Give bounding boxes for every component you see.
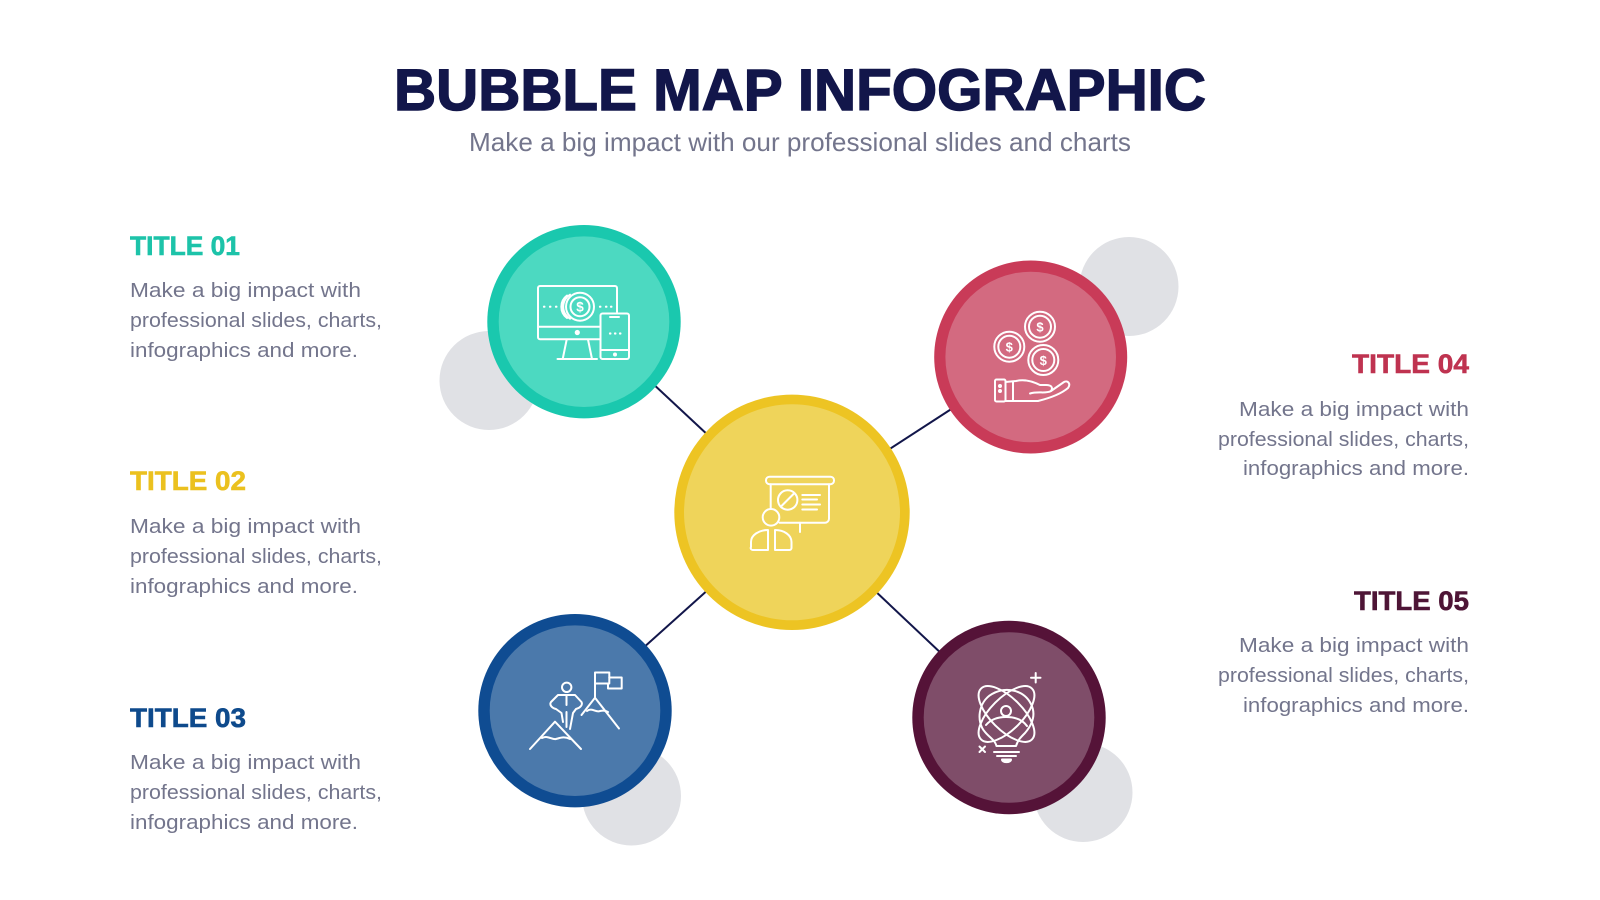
title: BUBBLE MAP INFOGRAPHIC	[394, 58, 1206, 123]
icon: hand with coins	[994, 312, 1069, 402]
icon: hand with coins: $	[1036, 320, 1044, 334]
text block: title 02: TITLE 02	[130, 466, 246, 496]
text block: title 04: TITLE 04	[1352, 349, 1469, 379]
connector lines	[642, 381, 956, 656]
text block: title 05: professional slides, charts,	[1218, 664, 1469, 687]
decorative bubble: blue shadow	[582, 746, 681, 846]
text block: title 03: TITLE 03	[130, 703, 246, 733]
bubble 02: yellow center	[674, 395, 910, 630]
bubble 04: red	[934, 260, 1127, 454]
text block: title 02	[130, 466, 382, 598]
bubble 03: blue	[478, 614, 672, 807]
icon: atom light bulb	[970, 673, 1043, 762]
text block: title 05: Make a big impact with	[1239, 634, 1469, 657]
text block: title 03: professional slides, charts,	[130, 781, 382, 804]
icon: hand with coins: $	[1006, 340, 1014, 354]
text block: title 05: infographics and more.	[1243, 694, 1469, 717]
text block: title 04: infographics and more.	[1243, 457, 1469, 480]
bubble 01: teal	[487, 225, 681, 418]
text block: title 03	[130, 703, 382, 834]
text block: title 04	[1218, 349, 1469, 480]
text block: title 01: Make a big impact with	[130, 279, 361, 302]
text block: title 05	[1218, 586, 1469, 717]
decorative bubble: purple shadow	[1034, 743, 1132, 842]
icon: presenter and board	[751, 477, 834, 550]
icon: monitor and phone with coin: $	[576, 300, 584, 314]
text block: title 03: infographics and more.	[130, 811, 358, 834]
bubble 05: purple	[912, 621, 1106, 814]
text block: title 03: Make a big impact with	[130, 751, 361, 774]
icon: person on mountain with flag	[530, 672, 622, 749]
text block: title 02: professional slides, charts,	[130, 545, 382, 568]
decorative bubble: red shadow	[1080, 237, 1178, 336]
text block: title 02: infographics and more.	[130, 575, 358, 598]
icon: hand with coins: $	[1040, 353, 1048, 368]
text block: title 02: Make a big impact with	[130, 515, 361, 538]
text block: title 01: professional slides, charts,	[130, 309, 382, 332]
text block: title 04: Make a big impact with	[1239, 398, 1469, 421]
subtitle: Make a big impact with our professional slides and charts	[469, 127, 1131, 157]
text block: title 01: TITLE 01	[130, 231, 240, 261]
decorative bubble: teal shadow	[440, 331, 538, 430]
text block: title 01	[130, 231, 382, 362]
text block: title 01: infographics and more.	[130, 339, 358, 362]
icon: monitor and phone with coin	[538, 286, 629, 359]
text block: title 05: TITLE 05	[1354, 586, 1469, 616]
text block: title 04: professional slides, charts,	[1218, 428, 1469, 451]
